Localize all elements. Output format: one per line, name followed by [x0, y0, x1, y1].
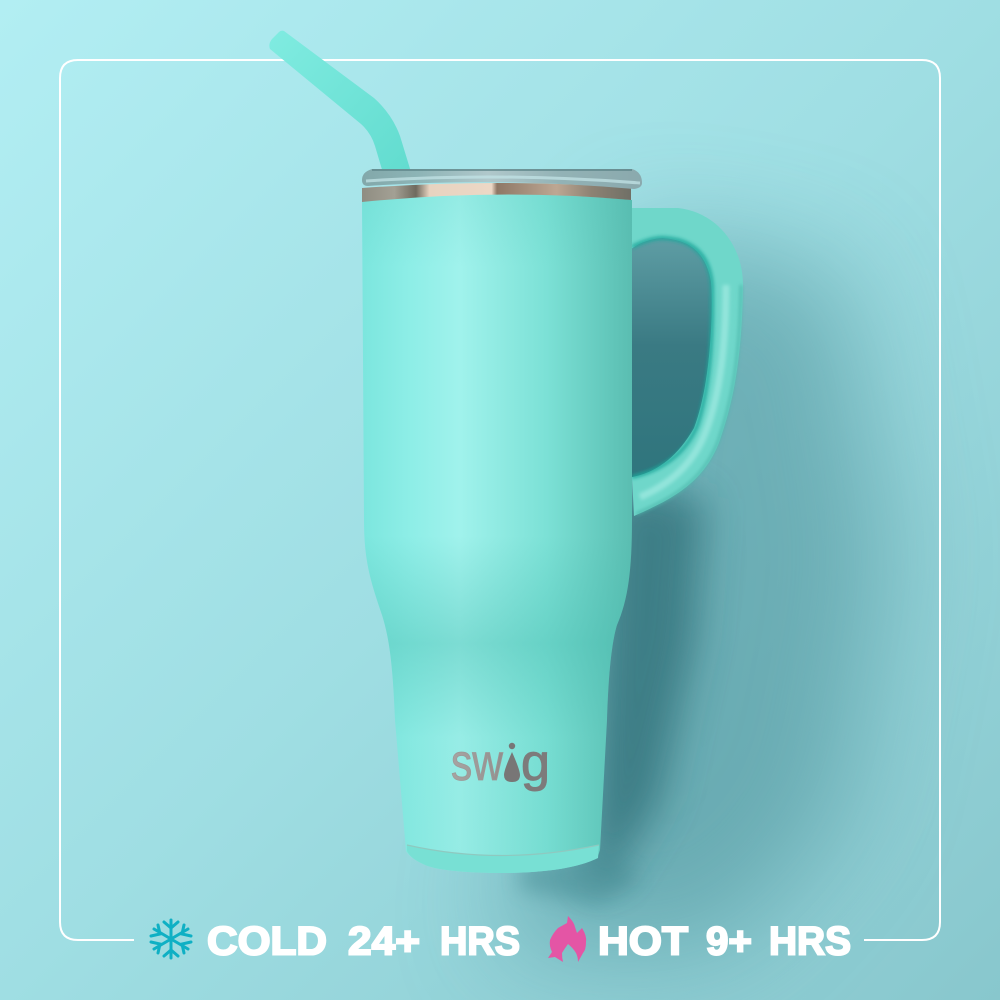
handle opening	[630, 238, 712, 478]
mug handle	[630, 208, 743, 516]
swig logo	[451, 734, 550, 792]
cold text: 24+	[348, 920, 420, 964]
swig logo: sw	[451, 734, 503, 792]
icon: snowflake	[151, 920, 191, 958]
mug body	[362, 194, 632, 873]
mug shadow	[500, 230, 890, 950]
clear lid	[362, 169, 642, 189]
hot text	[598, 920, 851, 964]
cold text: HRS	[440, 920, 520, 964]
cold text: COLD	[207, 920, 327, 964]
white rounded frame	[60, 60, 940, 940]
cold text	[207, 920, 520, 964]
swig logo: g	[521, 734, 550, 792]
hot text: HRS	[769, 920, 851, 964]
metal rim	[362, 183, 631, 202]
straw	[269, 31, 411, 173]
logo droplet	[504, 743, 520, 782]
hot text: 9+	[706, 920, 752, 964]
mug base ring	[407, 845, 599, 873]
icon: flame	[548, 916, 586, 962]
hot text: HOT	[598, 920, 688, 964]
